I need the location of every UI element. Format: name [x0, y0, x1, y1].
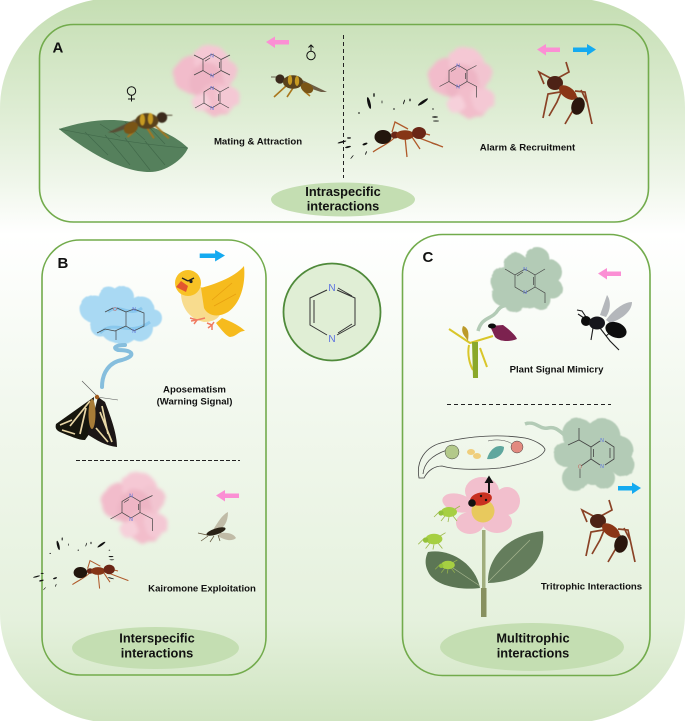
icon: black wasp — [577, 295, 632, 350]
arrow: blue — [200, 250, 225, 262]
pill: intraspecific interactions: Intraspecific — [305, 184, 381, 199]
pill: multitrophic interactions: interactions — [497, 646, 569, 660]
icon: flower with leaves and aphids — [418, 477, 543, 617]
molecule: ethyl-dimethylpyrazine: N — [129, 494, 133, 500]
pheromone cloud: alarm — [428, 47, 495, 118]
icon: alarmed ant with sparks — [337, 93, 443, 159]
icon: grey-green scent cloud — [478, 247, 563, 331]
label: alarm and recruitment: Alarm & Recruitment — [480, 142, 576, 154]
label: aposematism: Aposematism — [163, 384, 226, 396]
label: kairomone exploitation: Kairomone Exploitation — [148, 584, 256, 594]
molecule: trimethylpyrazine: N — [210, 86, 214, 92]
pill: interspecific interactions — [72, 627, 239, 669]
icon: warning smoke cloud — [80, 286, 162, 387]
icon: parasitoid larva sketch — [418, 436, 545, 478]
molecule: pyrazine — [310, 288, 355, 335]
arrow: pink, towards left — [266, 36, 289, 48]
label: warning signal: (Warning Signal) — [157, 396, 232, 408]
pill: intraspecific interactions: interactions — [307, 198, 379, 214]
pill: multitrophic interactions — [440, 623, 624, 671]
central pyrazine circle: N — [328, 334, 336, 345]
icon: angry yellow bird — [175, 266, 245, 337]
icon: tiger moth — [56, 381, 118, 447]
pheromone cloud: kairomone — [101, 472, 168, 543]
icon: standing ant — [582, 500, 635, 562]
molecule: ethyl-dimethylpyrazine: N — [523, 267, 527, 273]
icon: standing ant — [539, 62, 592, 124]
molecule: trimethylpyrazine — [195, 86, 229, 112]
molecule: tetramethylpyrazine: N — [210, 54, 214, 60]
arrow: pink — [537, 44, 560, 56]
icon: female symbol — [127, 87, 136, 102]
icon: hammer orchid — [449, 324, 517, 378]
divider — [447, 404, 611, 406]
molecule: ethyl-dimethylpyrazine — [505, 267, 545, 303]
molecule: isopropyl methoxypyrazine: O — [578, 464, 582, 470]
molecule: isopropyl methoxypyrazine: N — [600, 464, 604, 470]
molecule: ethyl-dimethylpyrazine — [110, 494, 152, 531]
pheromone cloud: mating — [173, 45, 240, 116]
molecule: ethyl-dimethylpyrazine: N — [523, 290, 527, 296]
label: mating and attraction: Mating & Attraction — [214, 136, 302, 148]
panel A: intraspecific interactions — [40, 24, 648, 222]
icon: male wasp — [271, 74, 327, 97]
icon: female wasp on leaf — [108, 112, 172, 138]
icon: scent cloud with molecule — [525, 418, 634, 491]
arrow: blue — [618, 482, 641, 494]
pill: interspecific interactions: interactions — [121, 646, 193, 660]
molecule: isopropyl methoxypyrazine — [568, 428, 614, 478]
icon: parasitoid fly — [198, 512, 236, 542]
molecule: tetramethylpyrazine: N — [210, 74, 214, 80]
arrow: black upward — [484, 476, 494, 493]
molecule: trimethylpyrazine: N — [210, 106, 214, 112]
molecule: methoxy pyrazine: O — [113, 307, 117, 313]
arrow: blue — [573, 44, 596, 56]
molecule: ethyl-dimethylpyrazine: N — [456, 64, 460, 70]
panel letter A: A — [52, 40, 64, 56]
molecule: ethyl-dimethylpyrazine — [440, 64, 476, 98]
divider — [342, 35, 344, 178]
arrow: pink — [598, 268, 621, 280]
molecule: ethyl-dimethylpyrazine: N — [456, 84, 460, 90]
pill: multitrophic interactions: Multitrophic — [496, 630, 570, 646]
panel B: interspecific interactions — [33, 240, 266, 675]
icon: ant with sparks — [33, 537, 128, 590]
arrow: pink — [216, 490, 239, 502]
molecule: methoxy pyrazine: N — [132, 329, 136, 335]
sub-icon: larva contents — [445, 440, 523, 459]
central pyrazine circle — [284, 264, 380, 360]
molecule: ethyl-dimethylpyrazine: N — [129, 517, 133, 523]
pill: interspecific interactions: Interspecific — [119, 630, 195, 646]
central pyrazine circle: N — [328, 283, 336, 294]
molecule: tetramethylpyrazine — [194, 54, 230, 80]
divider — [76, 460, 240, 462]
icon: leaf — [59, 120, 188, 172]
label: tritrophic interactions: Tritrophic Interactions — [541, 582, 642, 592]
molecule: methoxy pyrazine: N — [132, 307, 136, 313]
molecule: methoxy pyrazine — [97, 307, 144, 340]
label: plant signal mimicry: Plant Signal Mimicry — [510, 364, 604, 376]
pill: intraspecific interactions — [271, 182, 415, 216]
panel C: multitrophic interactions — [402, 234, 650, 676]
panel letter C: C — [422, 249, 434, 266]
sub-icon: ladybug — [468, 491, 493, 507]
molecule: isopropyl methoxypyrazine: N — [600, 438, 604, 444]
sub-icon: aphids — [418, 506, 460, 574]
icon: male symbol — [307, 45, 315, 60]
panel letter B: B — [58, 255, 68, 272]
